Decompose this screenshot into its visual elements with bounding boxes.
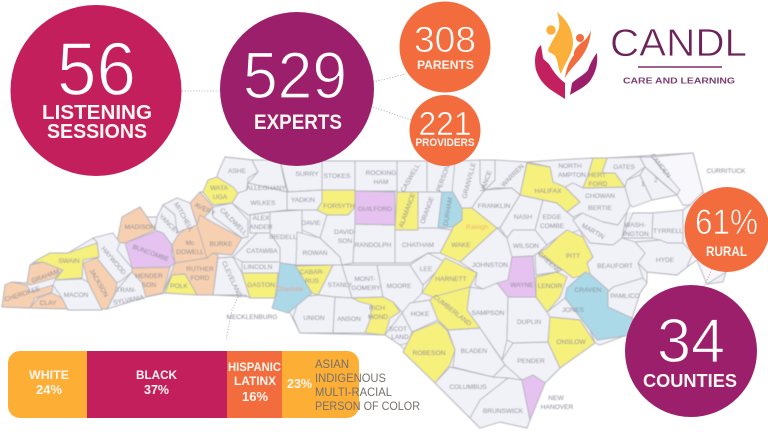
county names: JOHNSTON bbox=[472, 262, 508, 269]
county names: HANOVER bbox=[541, 404, 574, 411]
stat circle: 221 providers: PROVIDERS bbox=[416, 137, 474, 149]
segment: 23% other bbox=[282, 351, 359, 418]
county names: STANLY bbox=[328, 282, 353, 289]
county names: HAYWOOD bbox=[99, 246, 127, 277]
stat circle: 56 listening sessions: SESSIONS bbox=[47, 121, 147, 143]
stat circle: 34 counties: 34 bbox=[657, 307, 725, 376]
county names: RUTHER bbox=[186, 266, 214, 273]
county names: RICH bbox=[369, 305, 385, 312]
counties: peach bbox=[2, 192, 242, 309]
counties bbox=[2, 153, 726, 428]
county names: WAKE bbox=[451, 242, 471, 249]
albemarle sound bbox=[627, 195, 683, 212]
segment: hispanic latinx 16% bbox=[227, 351, 282, 418]
county names: CLAY bbox=[40, 300, 57, 307]
county names: GATES bbox=[613, 164, 636, 171]
segment: white 24%: WHITE bbox=[29, 368, 69, 382]
county names: MARTIN bbox=[580, 222, 606, 241]
stat circle: 308 parents: 308 bbox=[414, 19, 476, 60]
county names: YANCEY bbox=[157, 213, 181, 237]
county names: TRAN- bbox=[116, 287, 136, 294]
county names: GOMERY bbox=[351, 285, 381, 292]
county names: CHEROKEE bbox=[4, 285, 42, 304]
wordmark: CANDL bbox=[610, 22, 747, 65]
county names: PENDER bbox=[517, 358, 545, 365]
county names: BUNCOMBE bbox=[131, 244, 170, 264]
stat circle: 308 parents: PARENTS bbox=[417, 58, 474, 72]
county names: HARNETT bbox=[435, 276, 467, 283]
county names: ANSON bbox=[337, 316, 361, 323]
county names: HERT bbox=[588, 172, 606, 179]
map: North Carolina counties bbox=[2, 153, 746, 428]
county names: ALAMANCE bbox=[398, 192, 417, 229]
county names: MACON bbox=[64, 292, 89, 299]
counties: lilac bbox=[125, 191, 545, 420]
county names: RUS bbox=[305, 278, 320, 285]
county names: NASH bbox=[514, 214, 532, 221]
county names: ORANGE bbox=[419, 195, 436, 225]
county names: ROBESON bbox=[413, 350, 446, 357]
county names: WARREN bbox=[500, 163, 526, 189]
county names: UNION bbox=[303, 315, 325, 322]
county names: PERSON bbox=[436, 164, 452, 193]
logo: CANDL care and learning bbox=[535, 12, 747, 99]
stat circle: 61% rural bbox=[684, 187, 768, 272]
legend text: other groups: MULTI-RACIAL bbox=[315, 385, 392, 399]
county names: ALLEGHANY bbox=[246, 185, 286, 192]
county names: GREENE bbox=[536, 251, 562, 275]
county names: RANDOLPH bbox=[355, 242, 392, 249]
county names: PITT bbox=[566, 253, 580, 260]
stat circle: 529 experts bbox=[220, 12, 374, 166]
county names: HYDE bbox=[656, 257, 675, 264]
county names: LEE bbox=[420, 266, 433, 273]
county names: IREDELL bbox=[269, 234, 297, 241]
county names: DUPLIN bbox=[517, 319, 541, 326]
county names: VANCE bbox=[479, 169, 494, 193]
county names: 2 bbox=[654, 177, 658, 184]
segment: hispanic latinx 16%: HISPANIC bbox=[228, 362, 281, 374]
county names: DURHAM bbox=[443, 197, 454, 227]
county names: TYRRELL bbox=[653, 228, 683, 235]
county names: MADISON bbox=[125, 224, 156, 231]
county names: ANDER bbox=[249, 224, 273, 231]
county names: INGTON bbox=[623, 231, 649, 238]
county names: GRAHAM bbox=[31, 268, 60, 285]
county names: HALIFAX bbox=[534, 188, 562, 195]
county names: ASHE bbox=[228, 168, 247, 175]
stat circle: 529 experts: 529 bbox=[243, 38, 347, 112]
county names: BLADEN bbox=[461, 348, 487, 355]
county names: COMBE bbox=[540, 223, 565, 230]
legend text: other groups: PERSON OF COLOR bbox=[315, 399, 420, 413]
county names: CALDWELL bbox=[218, 207, 248, 237]
county names: MITCHELL bbox=[172, 201, 195, 233]
counties: yellow bbox=[33, 158, 625, 383]
county names: JACKSON bbox=[87, 268, 109, 299]
county names: ROWAN bbox=[302, 250, 328, 257]
county names: PAMLICO bbox=[610, 293, 640, 300]
county names: CLEVELAND bbox=[220, 260, 243, 299]
county names: ALEX bbox=[253, 215, 270, 222]
stat circle: 221 providers bbox=[410, 95, 480, 166]
legend text: other groups: INDIGENOUS bbox=[315, 371, 386, 385]
segment: white 24% bbox=[8, 351, 87, 418]
county names: LENOIR bbox=[538, 283, 563, 290]
segment: black 37%: BLACK bbox=[136, 368, 177, 382]
county names: CATAWBA bbox=[246, 248, 278, 255]
county names: JONES bbox=[562, 307, 585, 314]
county names: COLUMBUS bbox=[449, 384, 487, 391]
icon: hands and flame figures bbox=[535, 12, 597, 99]
county names: SYLVANIA bbox=[113, 294, 145, 307]
stat circle: 56 listening sessions: 56 bbox=[57, 27, 136, 111]
county names: AMPTON bbox=[558, 172, 586, 179]
county names: Charlotte bbox=[277, 286, 304, 293]
county names: CHOWAN bbox=[585, 193, 615, 200]
segment: white 24%: 24% bbox=[36, 383, 62, 397]
county names: BURKE bbox=[210, 241, 233, 248]
county names: Mc bbox=[186, 240, 195, 247]
segment: hispanic latinx 16%: LATINX bbox=[234, 376, 276, 388]
county names: AVERY bbox=[193, 202, 217, 218]
county names: BEAUFORT bbox=[597, 263, 633, 270]
county names: EDGE bbox=[543, 214, 562, 221]
segment: hispanic latinx 16%: 16% bbox=[242, 390, 268, 404]
county names: MOORE bbox=[387, 283, 412, 290]
county names: CAMDEN bbox=[649, 153, 672, 180]
county names: WILSON bbox=[513, 243, 539, 250]
county names: CABAR- bbox=[300, 269, 324, 276]
county names: HOKE bbox=[411, 311, 430, 318]
county names: SON bbox=[142, 282, 156, 289]
stat circle: 56 listening sessions: LISTENING bbox=[42, 102, 152, 124]
county names: UGA bbox=[213, 194, 228, 201]
segment: black 37%: 37% bbox=[144, 383, 169, 397]
county names: SON bbox=[338, 238, 352, 245]
stat circle: 34 counties bbox=[625, 285, 757, 417]
county names: BRUNSWICK bbox=[483, 408, 524, 415]
county names: FRANKLIN bbox=[478, 203, 511, 210]
county names: LINCOLN bbox=[244, 264, 273, 271]
county names: FORD bbox=[191, 275, 210, 282]
county names: MECKLENBURG bbox=[227, 314, 277, 321]
county names: FORSYTH bbox=[323, 203, 355, 210]
county names: WILKES bbox=[251, 200, 276, 207]
county names: GUILFORD bbox=[358, 206, 392, 213]
segment: 23% other: 23% bbox=[287, 377, 312, 391]
connector lines bbox=[182, 74, 712, 340]
county names: CRAVEN bbox=[574, 287, 602, 294]
county names: WAYNE bbox=[510, 282, 534, 289]
stat circle: 308 parents bbox=[400, 2, 490, 92]
county names: ONSLOW bbox=[556, 339, 586, 346]
county names: WATA bbox=[210, 185, 229, 192]
counties: white west bbox=[53, 198, 248, 310]
county names: MOND bbox=[368, 314, 388, 321]
county names: GASTON bbox=[247, 282, 275, 289]
county names: DAVID- bbox=[334, 229, 356, 236]
county names: CURRITUCK bbox=[707, 168, 746, 175]
legend text: other groups bbox=[315, 357, 420, 413]
county names: BERTIE bbox=[588, 205, 612, 212]
county names: HENDER bbox=[135, 273, 163, 280]
demographic bar bbox=[8, 351, 420, 418]
county names: SWAIN bbox=[58, 258, 80, 265]
stat circle: 529 experts: EXPERTS bbox=[254, 111, 342, 134]
county names: SAMPSON bbox=[472, 310, 505, 317]
county names: SURRY bbox=[296, 171, 319, 178]
stat circle: 221 providers: 221 bbox=[418, 105, 472, 142]
county names: POLK bbox=[170, 283, 188, 290]
county names: WASH- bbox=[624, 222, 646, 229]
stat circle: 61% rural: 61% bbox=[695, 203, 758, 242]
county names: 1 bbox=[641, 181, 645, 188]
county names: FORD bbox=[589, 181, 608, 188]
county names: YADKIN bbox=[291, 197, 315, 204]
county names: DAVIE bbox=[301, 220, 321, 227]
counties: blue bbox=[272, 192, 632, 340]
county names: CHATHAM bbox=[402, 242, 434, 249]
stat circle: 56 listening sessions bbox=[10, 5, 182, 176]
county names: DOWELL bbox=[176, 249, 204, 256]
county names: MONT- bbox=[354, 276, 376, 283]
county names: NORTH bbox=[558, 163, 582, 170]
county names: HAM bbox=[374, 179, 388, 186]
county names: SCOT bbox=[389, 326, 407, 333]
county names bbox=[4, 153, 746, 415]
county names: CUMBERLAND bbox=[432, 294, 472, 328]
county names: NEW bbox=[548, 395, 564, 402]
segment: black 37% bbox=[87, 351, 227, 418]
stat circle: 34 counties: COUNTIES bbox=[643, 371, 737, 391]
county names: STOKES bbox=[324, 173, 351, 180]
tagline: CARE AND LEARNING bbox=[623, 76, 735, 86]
county names: Raleigh bbox=[466, 224, 489, 231]
state base bbox=[2, 153, 726, 428]
stat circle: 61% rural: RURAL bbox=[706, 243, 747, 259]
county names: ROCKING bbox=[366, 170, 396, 177]
county names: GRANVILLE bbox=[461, 161, 478, 199]
county names: LAND bbox=[391, 334, 409, 341]
county names: CASWELL bbox=[400, 163, 422, 194]
legend text: other groups: ASIAN bbox=[315, 357, 349, 371]
